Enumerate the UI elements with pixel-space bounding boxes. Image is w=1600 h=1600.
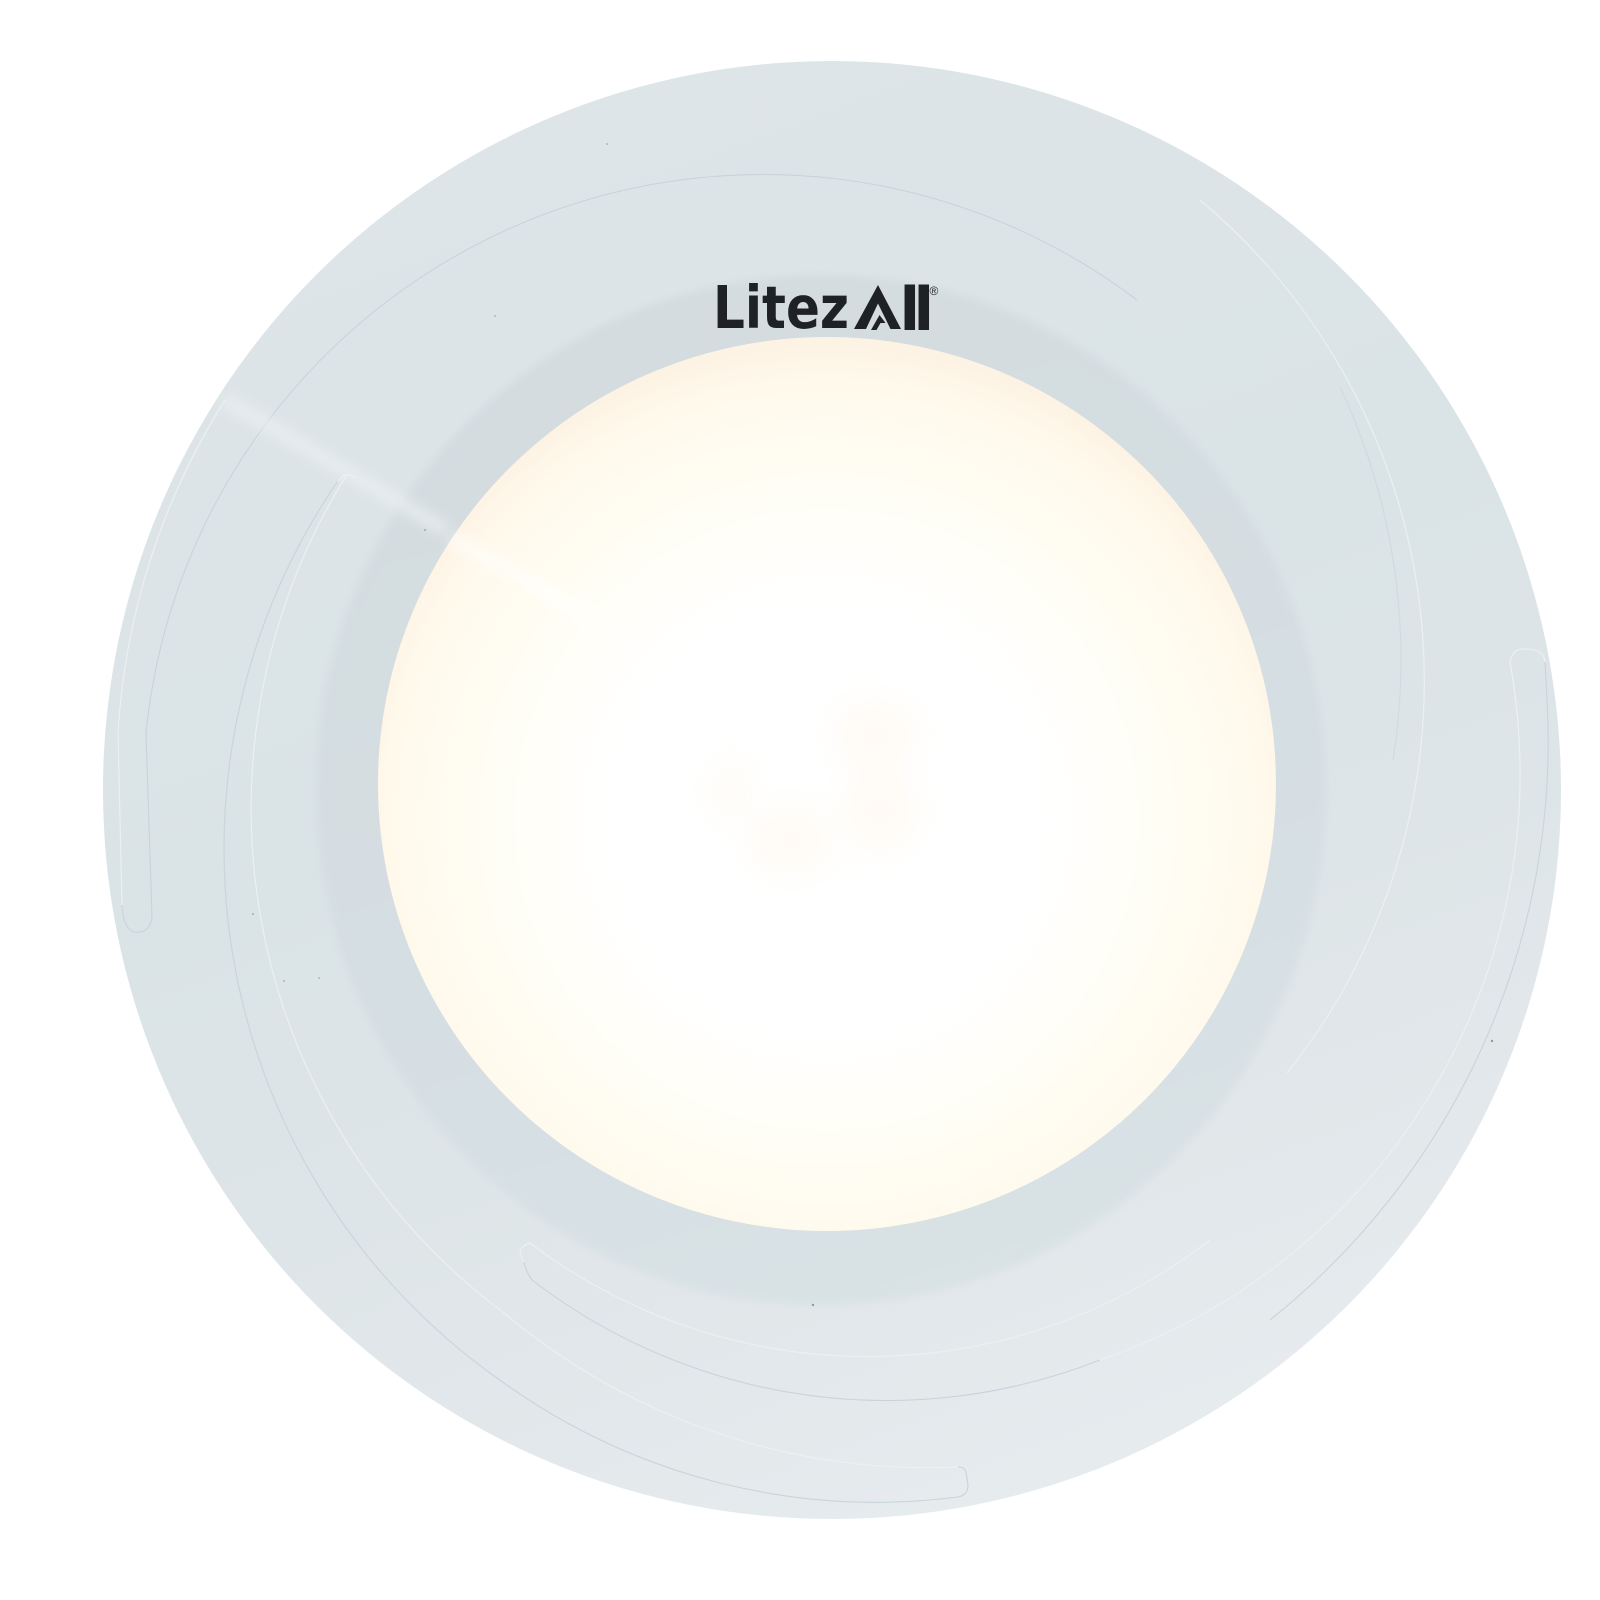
ridge: upper right dark line (1340, 387, 1401, 760)
light streak on housing (225, 400, 446, 530)
ridge: left tab to top right (122, 174, 1137, 932)
ridge: inner tab upper line (520, 1240, 1210, 1357)
logo letters ll: ll (900, 275, 934, 345)
registered mark: ® (930, 284, 938, 298)
ridge: inner tab lower line (524, 1262, 1100, 1401)
dust specks (252, 143, 1493, 1306)
ridge: upper right light line (1200, 200, 1424, 1073)
moulded spiral ridges (118, 174, 1548, 1502)
logo: LitezAll (713, 273, 938, 345)
ridge: right tab outer line (1270, 662, 1548, 1320)
LED shadow blobs behind lens (714, 703, 917, 872)
lens glowing disc (378, 337, 1276, 1231)
logo word Litez: Litez (713, 273, 849, 342)
inner recessed band around lens (316, 275, 1326, 1305)
light streak on lens (452, 538, 640, 645)
ridge: long dark line to bottom tab (224, 478, 968, 1502)
ridge: left tab outer edge (118, 400, 225, 905)
ridge: right tab inner line (1100, 649, 1545, 1360)
ridge: long light line to bottom tab (251, 475, 958, 1468)
